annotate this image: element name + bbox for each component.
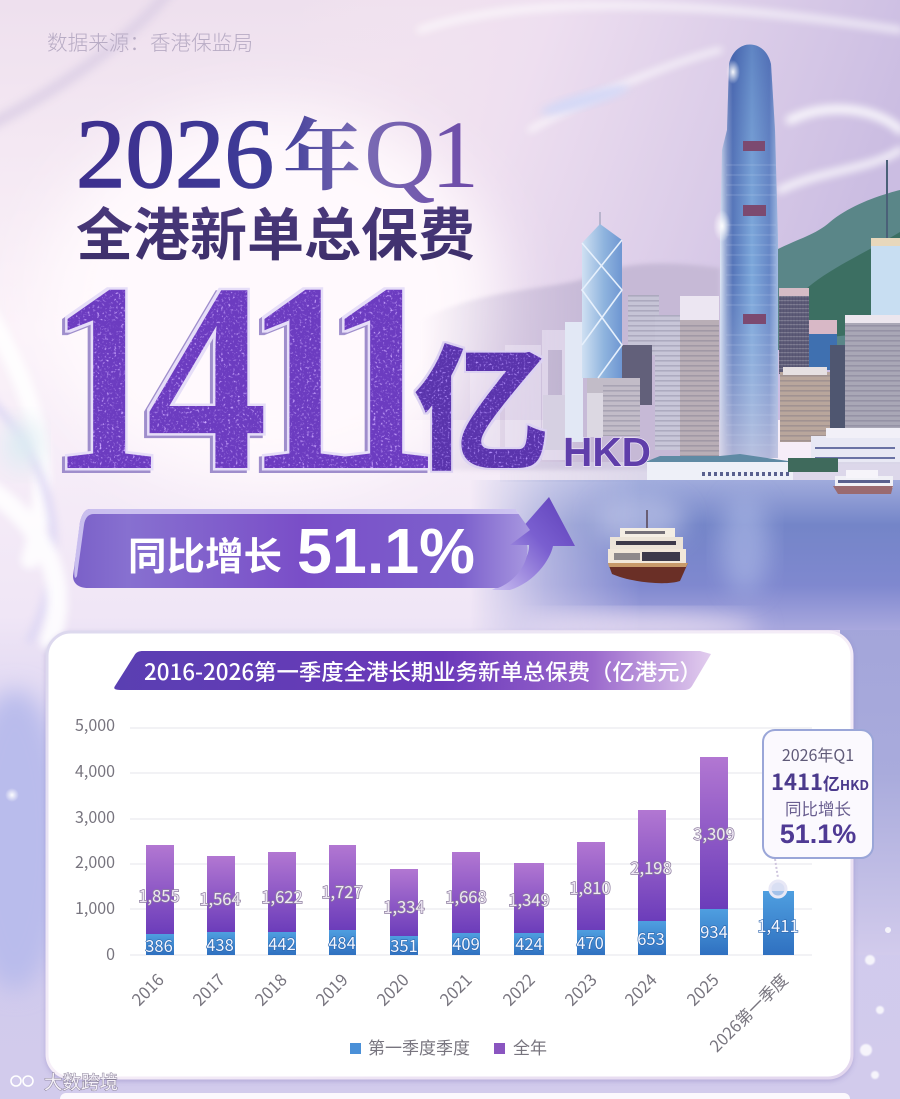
growth banner (73, 497, 575, 590)
big number 1411: 1 (49, 228, 163, 526)
first-quarter value labels: 386 (145, 933, 173, 957)
x axis labels: 2021 (434, 968, 477, 1010)
x axis labels: 2024 (619, 968, 662, 1010)
first-quarter value labels: 484 (328, 930, 356, 954)
unit HKD: HKD (563, 429, 651, 475)
callout: 2026 Q1: 51.1% (780, 819, 856, 849)
x axis labels: 2025 (681, 968, 724, 1010)
y axis and gridlines: 4,000 (75, 758, 115, 782)
Bank of China Tower (582, 212, 622, 378)
source note: 数据来源：香港保监局 (47, 26, 253, 56)
full-year value labels: 1,855 (138, 883, 180, 907)
full-year value labels: 3,309 (693, 821, 735, 845)
hazy distant hills (420, 264, 720, 470)
full-year value labels: 1,622 (261, 884, 303, 908)
right blocks (779, 160, 900, 464)
first-quarter value labels: 409 (452, 931, 480, 955)
first-quarter value labels: 653 (637, 926, 665, 950)
full-year value labels: 1,349 (508, 887, 550, 911)
x axis labels: 2026第一季度 (703, 968, 793, 1057)
y axis and gridlines: 3,000 (75, 804, 115, 828)
title: 2026年Q1: 1 (431, 101, 479, 208)
callout: 2026 Q1: 同比增长 (785, 796, 851, 820)
callout: 2026 Q1: 2026年Q1 (782, 742, 854, 766)
watermark: 大数跨境 (44, 1069, 118, 1095)
cityscape: Hong Kong harbour skyline (420, 44, 900, 642)
title: 2026年Q1: Q (364, 100, 436, 209)
big number 1411 (49, 227, 440, 527)
subtitle: 全港新单总保费 (76, 190, 475, 272)
watermark (11, 1069, 118, 1095)
full-year value labels: 2,198 (630, 855, 672, 879)
full-year value labels: 1,810 (569, 875, 611, 899)
unit 亿: 亿 (414, 301, 549, 497)
big number 1411: 1 (247, 229, 357, 527)
callout: 2026 Q1 (763, 730, 873, 897)
x axis labels: 2018 (249, 968, 292, 1010)
left mid-rise blocks (543, 295, 719, 457)
full-year value labels: 1,564 (199, 886, 241, 910)
next panel top edge (60, 1093, 850, 1099)
first-quarter value labels: 438 (206, 932, 234, 956)
first-quarter value labels: 1,411 (757, 913, 799, 937)
y axis and gridlines: 5,000 (75, 712, 115, 736)
title: 2026年Q1 (76, 94, 479, 209)
first-quarter value labels: 442 (268, 931, 296, 955)
stacked bars (146, 757, 794, 955)
y axis and gridlines: 1,000 (75, 895, 115, 919)
legend: 全年 (513, 1034, 547, 1059)
IFC 2 tower (713, 44, 778, 458)
full-year value labels: 1,334 (383, 894, 425, 918)
banner value: 51.1% (297, 515, 475, 587)
big number 1411: 4 (146, 227, 268, 527)
callout: 2026 Q1: 1411亿HKD (771, 765, 869, 797)
first-quarter value labels: 424 (515, 931, 543, 955)
x axis labels: 2017 (187, 968, 230, 1010)
panel: chart (47, 632, 873, 1078)
full-year value labels (138, 821, 735, 918)
x axis labels: 2019 (310, 968, 353, 1010)
first-quarter value labels: 934 (700, 919, 728, 943)
waterfront pier (514, 454, 900, 480)
first-quarter value labels: 470 (576, 930, 604, 954)
x axis labels: 2016 (126, 968, 169, 1010)
first-quarter value labels (145, 913, 799, 957)
x axis labels: 2020 (371, 968, 414, 1010)
legend (350, 1034, 547, 1059)
y axis and gridlines: 2,000 (75, 849, 115, 873)
arrow (492, 497, 575, 590)
green mountain (776, 190, 900, 350)
chart heading ribbon: 2016-2026第一季度全港长期业务新单总保费（亿港元） (144, 655, 702, 687)
legend: 第一季度季度 (368, 1034, 470, 1059)
title: 2026年Q1: 年 (283, 94, 361, 206)
first-quarter value labels: 351 (390, 933, 418, 957)
x axis labels (126, 968, 793, 1057)
ferry (608, 510, 688, 583)
water (480, 480, 900, 630)
far ferry (833, 470, 893, 494)
x axis labels: 2022 (497, 968, 540, 1010)
banner label: 同比增长 (128, 526, 282, 582)
full-year value labels: 1,668 (445, 884, 487, 908)
big number 1411: 1 (326, 228, 440, 526)
x axis labels: 2023 (559, 968, 602, 1010)
full-year value labels: 1,727 (321, 879, 363, 903)
y axis and gridlines: 0 (106, 941, 115, 965)
title: 2026年Q1: 2026 (76, 100, 274, 209)
y axis and gridlines (75, 712, 812, 965)
